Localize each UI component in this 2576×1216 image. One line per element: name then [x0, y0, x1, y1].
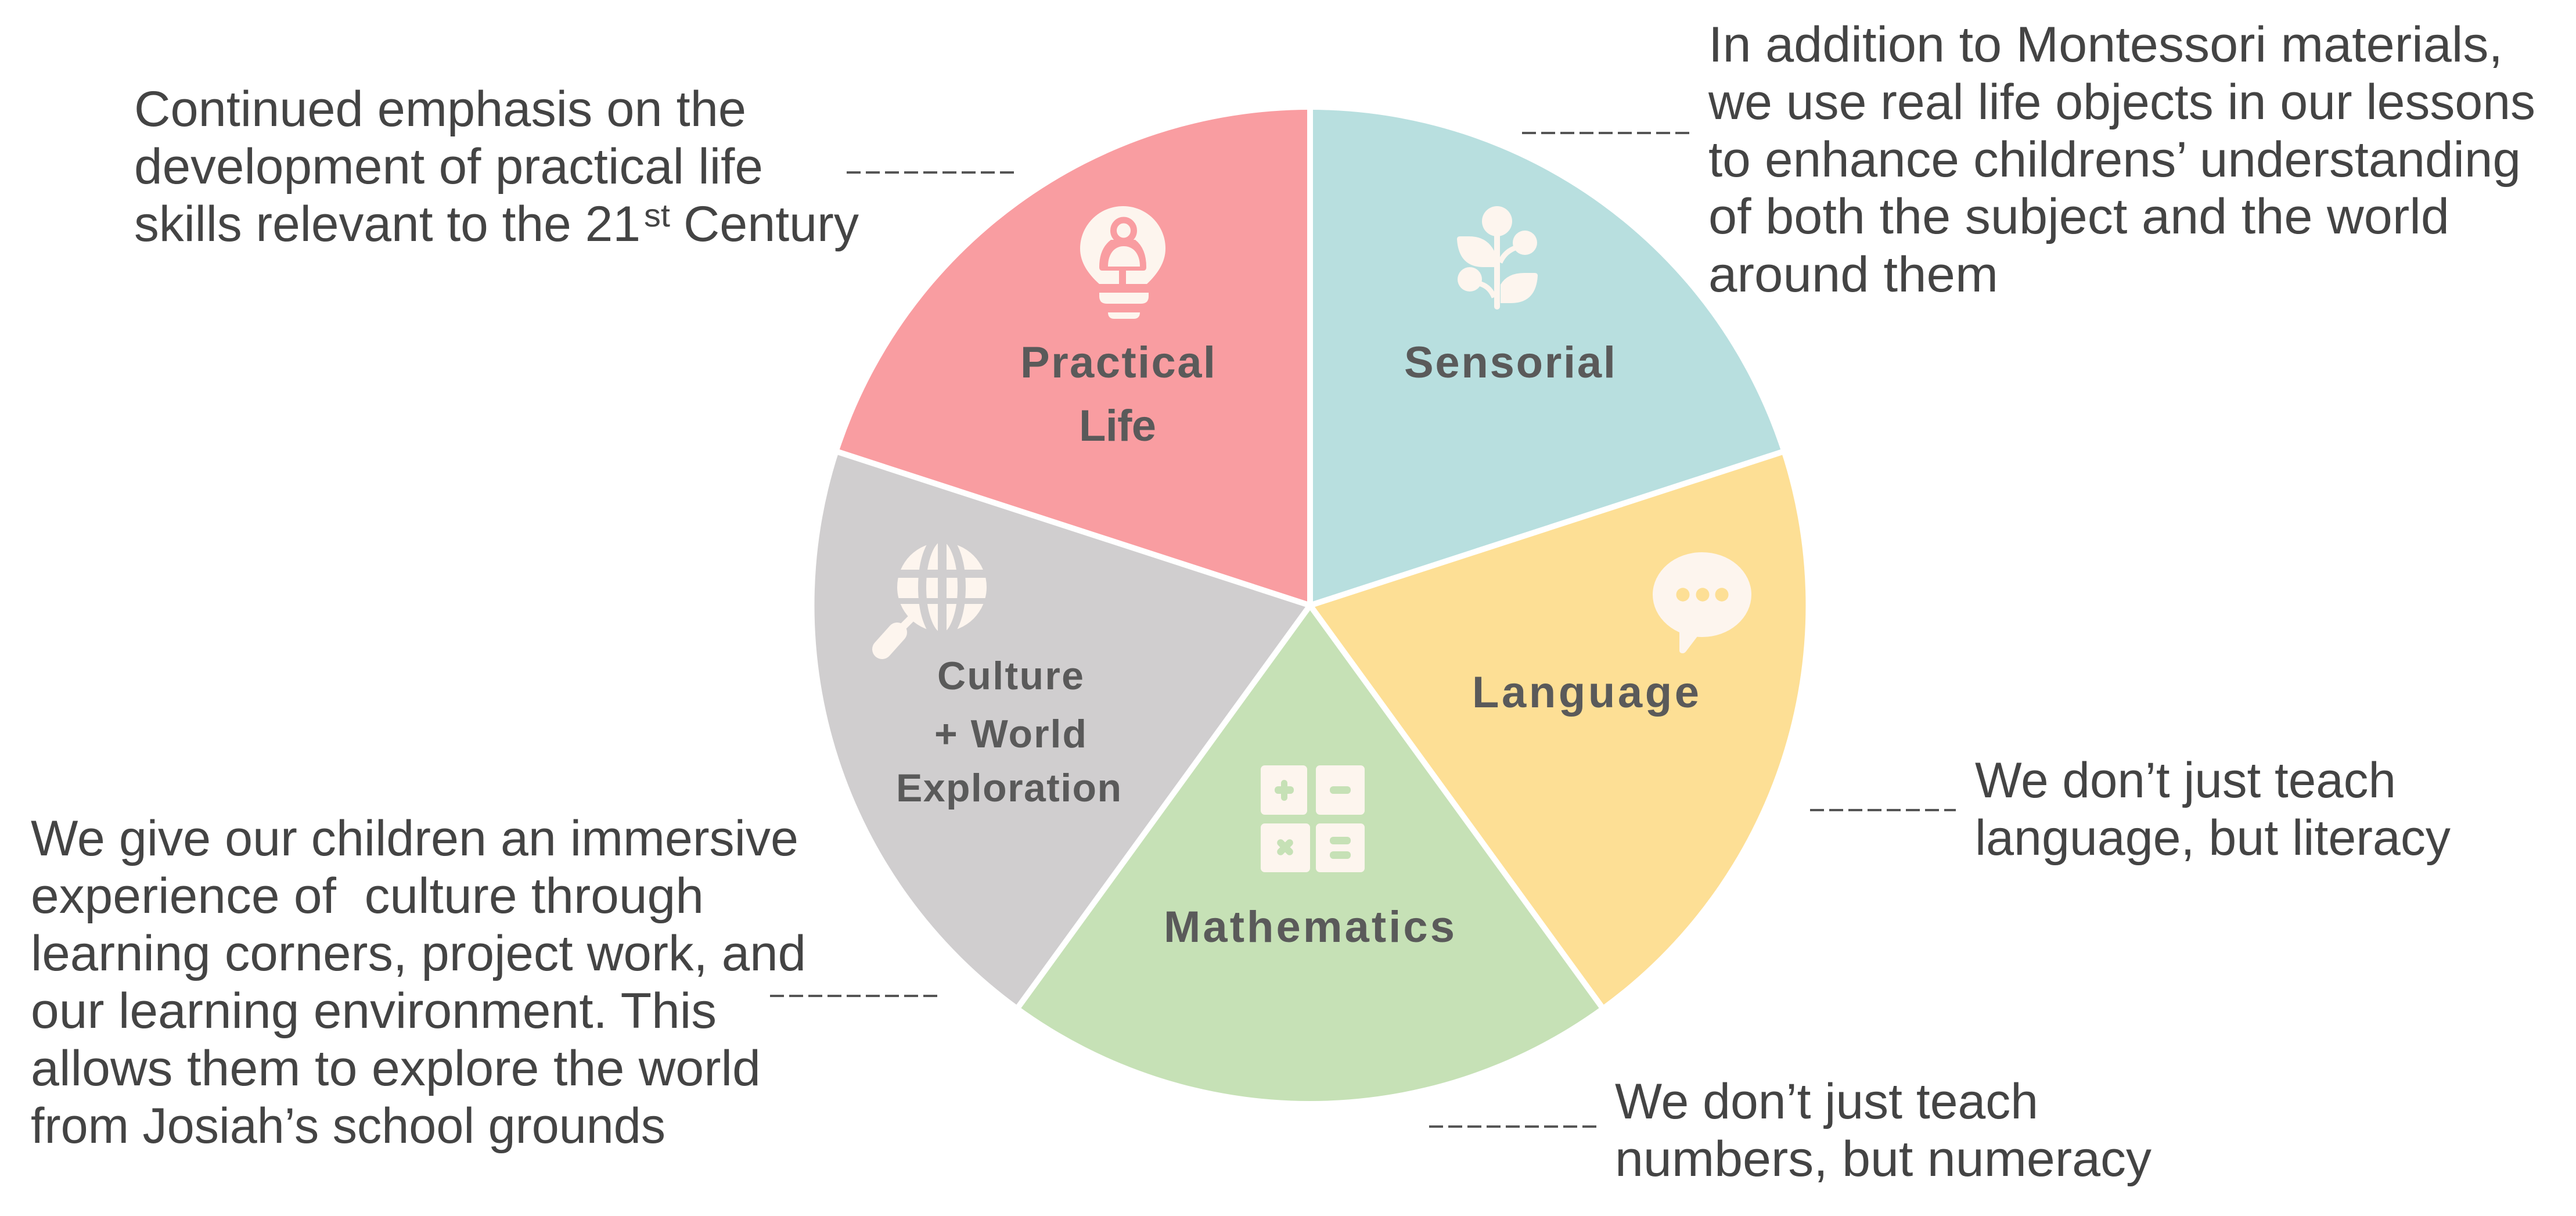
text: sensorial description: In addition to Montessori materials,: [1708, 17, 2503, 73]
text: practical life description: Continued emphasis on the: [134, 81, 746, 137]
text: sensorial description: of both the subject and the world: [1708, 189, 2449, 244]
text: sensorial description: to enhance childrens’ understanding: [1708, 132, 2521, 188]
text: language description: We don’t just teach: [1975, 753, 2396, 808]
text: sensorial description: we use real life objects in our lessons: [1708, 74, 2535, 130]
segment: practical life: [839, 110, 1310, 605]
text: culture description: allows them to explore the world: [31, 1041, 761, 1096]
icon: plant sprig: [1457, 206, 1538, 310]
text: practical life description: Century: [683, 196, 859, 252]
label: culture and world exploration: [896, 654, 1121, 810]
icon: speech bubble: [1653, 552, 1751, 653]
text: culture description: our learning environment. This: [31, 983, 717, 1039]
label: practical life: Life: [1079, 401, 1156, 451]
text: culture description: We give our children an immersive: [31, 811, 798, 866]
segment: culture and world exploration: [815, 452, 1310, 1006]
text: practical life description: st: [644, 197, 670, 233]
text: culture description: [31, 811, 806, 1154]
label: practical life: [1020, 338, 1215, 451]
icon: calculator keys: [1261, 765, 1365, 872]
text: mathematics description: We don’t just teach: [1615, 1074, 2038, 1129]
text: practical life description: development of practical life: [134, 139, 763, 195]
text: culture description: from Josiah’s school grounds: [31, 1098, 665, 1154]
segment: sensorial: [1310, 110, 1782, 605]
text: culture description: learning corners, project work, and: [31, 926, 806, 981]
label: sensorial: Sensorial: [1404, 338, 1616, 387]
segment: language: [1310, 452, 1805, 1006]
label: culture and world exploration: Culture: [937, 654, 1084, 698]
text: mathematics description: numbers, but numeracy: [1615, 1131, 2152, 1187]
text: practical life description: skills relevant to the 21: [134, 196, 641, 252]
label: culture and world exploration: Exploration: [896, 766, 1121, 810]
pie chart: [815, 105, 1805, 1101]
icon: globe with magnifier handle: [882, 537, 990, 649]
icon: lightbulb with person: [1080, 206, 1165, 319]
segment: mathematics: [1019, 605, 1602, 1101]
connector: practical life: [847, 171, 1015, 174]
label: practical life: Practical: [1020, 338, 1215, 387]
connector: culture: [770, 995, 938, 997]
connector: sensorial: [1522, 132, 1692, 134]
text: sensorial description: [1708, 17, 2535, 303]
text: practical life description: [134, 81, 859, 252]
text: mathematics description: [1615, 1074, 2152, 1187]
label: mathematics: Mathematics: [1164, 902, 1455, 952]
label: language: Language: [1472, 668, 1699, 717]
connector: mathematics: [1429, 1125, 1597, 1128]
text: language description: language, but literacy: [1975, 810, 2451, 866]
text: culture description: experience of culture through: [31, 868, 704, 924]
text: language description: [1975, 753, 2451, 866]
connector: language: [1810, 809, 1956, 811]
label: culture and world exploration: + World: [934, 712, 1086, 756]
text: sensorial description: around them: [1708, 247, 1998, 303]
